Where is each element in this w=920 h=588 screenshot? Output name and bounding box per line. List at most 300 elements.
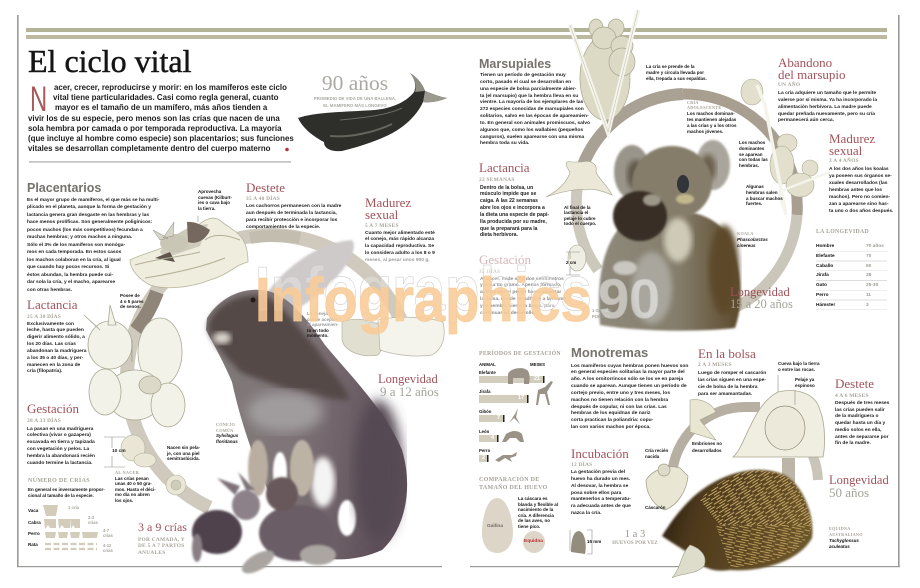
callout: cria recien nacida: Cría recién: [645, 448, 668, 453]
callout: cueva: [778, 361, 820, 372]
text: cortejo previo, entre uno y tres meses, los: [571, 391, 670, 396]
panel: madurez sexual conejo: lo considera adulto a los 8 o 9: [365, 251, 435, 256]
callout: pesa: [592, 308, 612, 318]
panel: abandono del marsupio: valerse por sí misma. Ya ha incorporado la: [778, 98, 877, 103]
text: año. A los ornitorrincos sólo se los ve en pareja: [571, 377, 683, 382]
panel: lactancia conejo: abandonan la madriguera: [27, 349, 87, 354]
text: corta practican la poliandria: copu-: [571, 418, 653, 423]
species label: koala: cinereus: [737, 243, 756, 248]
illustration: baby rabbits: [192, 472, 336, 578]
panel: placentarios: hace menos prolíficas. Son generalmente poligínicos:: [27, 220, 152, 225]
species label: conejo: Sylvilagus: [216, 433, 238, 438]
text: solitarios, salvo en las épocas de apareamien-: [480, 114, 589, 119]
stat: 1 a 3 huevos: [612, 529, 658, 546]
heading: periodos de gestacion: PERÍODOS DE GESTACIÓN: [479, 351, 561, 357]
panel: monotremas: Monotremas: [571, 345, 648, 360]
callout: senos: 4 o 5 pares: [120, 299, 144, 304]
panel: abandono del marsupio: Abandono: [778, 55, 832, 70]
panel: placentarios: pocos machos (los más competitivos) fecundan a: [27, 228, 143, 232]
illustration: newborn rabbit: [121, 435, 186, 495]
callout: hembras: hembras salen: [746, 190, 778, 195]
intro text: vitales se desarrollan completamente dentro del cuerpo materno: [28, 144, 270, 153]
panel: madurez sexual koala: sexual: [829, 142, 862, 158]
panel: madurez sexual conejo: [365, 195, 435, 263]
panel: placentarios: Es el mayor grupo de mamíferos, el que más se ha multi-: [27, 198, 159, 202]
callout: cria se prende: La cría se prende de la: [646, 64, 695, 69]
whale caption: PROMEDIO DE VIDA DE UNA BALLENA,: [314, 96, 396, 101]
callout: cria adolescente: tes mantienen alejadas: [687, 117, 736, 122]
icon: red end bullet: [285, 148, 289, 151]
panel: lactancia conejo: digerir alimento sólido, a: [27, 335, 85, 340]
callout: cueva: Cueva bajo la tierra: [778, 361, 820, 366]
callout: cria adolescente: a las crías y a los otros: [687, 123, 737, 128]
panel: abandono del marsupio: alimentación herbívora. La madre puede: [778, 105, 872, 110]
panel: destete conejo: 35 A 40 DÍAS: [246, 196, 280, 202]
panel: destete conejo: comportamientos de la especie.: [246, 225, 320, 230]
chart labels: gestacion: 2: [482, 455, 485, 461]
panel: en la bolsa: [698, 346, 766, 397]
callout: madrigueras: [198, 189, 232, 211]
callout: madrigueras: cuevas (Kilburt-: [198, 195, 232, 200]
callout: senos: Posee de: [120, 293, 140, 298]
litter labels: crías: [103, 548, 113, 553]
illustration: whale: [298, 73, 447, 151]
panel: madurez sexual conejo: Madurez: [365, 195, 411, 210]
panel: numero de crias: Rata: [28, 542, 38, 547]
egg labels: Gallina: [487, 524, 503, 529]
panel: numero de crias: Cabra: [28, 520, 41, 525]
callout: cria se prende: ella, trepada a sus espaldas.: [646, 76, 707, 81]
table: la longevidad: Caballo: [816, 264, 833, 268]
panel: incubacion: La gestación previa del: [571, 470, 625, 475]
panel: gestacion koala: Al nacer, mide sólo dos centímetros: [480, 276, 564, 282]
ring: koala life cycle: [576, 94, 797, 312]
icon: echidna egg silhouette: [571, 531, 586, 554]
panel: destete equidna: quedar hasta un día y: [835, 421, 885, 426]
panel: placentarios: plicado en el planeta, aunque la forma de gestación y: [27, 205, 151, 210]
whale caption: EL MAMÍFERO MÁS LONGEVO: [323, 103, 387, 108]
panel: madurez sexual conejo: sexual: [365, 206, 398, 222]
species label: equidna: aculeatus: [829, 544, 850, 549]
panel: destete equidna: 4 A 6 MESES: [835, 392, 869, 398]
text: después de copular, ni con las crías. Las: [571, 405, 667, 410]
callout: al nacer: unas 40 o 50 gra-: [115, 481, 152, 486]
panel: lactancia conejo: [27, 297, 87, 374]
callout: cria adolescente: [687, 100, 737, 134]
table: la longevidad: 50: [866, 264, 871, 268]
table: la longevidad: 28: [866, 273, 871, 278]
illustration: echidna burrow: [733, 391, 825, 488]
panel: madurez sexual koala: [829, 131, 894, 214]
panel: destete conejo: Destete: [246, 180, 285, 195]
callout: coneja: al apareamien-: [307, 322, 339, 327]
table: la longevidad: [816, 229, 887, 310]
callout: embriones: Embriones no: [692, 441, 722, 446]
callout: cria adolescente: ADOLESCENTE: [687, 105, 721, 110]
panel: destete equidna: [835, 378, 889, 448]
panel: lactancia koala: [479, 160, 549, 238]
panel: abandono del marsupio: quedar preñada nuevamente, pero su cría: [778, 112, 875, 117]
panel: numero de crias: [28, 476, 105, 547]
panel: placentarios: mos en cada temporada. En estos casos: [27, 250, 121, 255]
panel: madurez sexual conejo: Cuanto mejor alimentado esté: [365, 230, 435, 236]
litter labels: 4-12: [103, 543, 111, 548]
panel: lactancia conejo: 25 A 30 DÍAS: [27, 314, 61, 320]
whale caption: [314, 71, 396, 108]
panel: destete equidna: medio solos en ella,: [835, 428, 881, 433]
callout: machos dominantes: Los machos: [739, 140, 765, 145]
callout: al nacer: mos. Hasta el déci-: [115, 487, 156, 492]
text: Los mamíferos cuyas hembras ponen huevos son: [571, 364, 688, 368]
species label: conejo: COMÚN: [216, 428, 234, 433]
panel: en la bolsa: Luego de romper el cascarón: [698, 371, 766, 376]
panel: gestacion conejo: cuando termine la lactancia.: [27, 461, 93, 466]
panel: en la bolsa: para ser amamantadas.: [698, 392, 752, 397]
callout: cascara: blanda y flexible al: [518, 502, 558, 507]
callout: al nacer: Las crías pesan: [115, 476, 149, 480]
panel: destete conejo: Los cachorros permanecen con la madre: [246, 204, 341, 209]
panel: en la bolsa: 2 A 3 MESES: [698, 362, 732, 368]
panel: lactancia koala: músculo impide que se: [480, 191, 536, 197]
callout: pelaje cubre: Al final de la: [564, 205, 591, 210]
panel: destete equidna: Después de tres meses: [835, 401, 889, 406]
egg label: equidna: Equidna: [524, 539, 543, 544]
table: la longevidad: Jirafa: [816, 273, 829, 278]
panel: incubacion: [571, 446, 631, 516]
chart labels: gestacion: Gibón: [479, 409, 491, 414]
illustration: echidna: [662, 470, 812, 578]
panel: madurez sexual koala: zan a aparearse sino has-: [829, 202, 889, 206]
panel: destete equidna: de la madriguera o: [835, 414, 878, 419]
panel: placentarios: los machos colaboran en la cría, al igual: [27, 258, 121, 262]
stat: longevidad equidna: [829, 474, 889, 499]
header bars: [26, 28, 887, 39]
intro text: sola hembra por camada o por temporada reproductiva. La mayoría: [28, 124, 281, 133]
illustration: koala climbing with young: [570, 10, 638, 132]
panel: gestacion koala: avanza por el pelaje hasta alcanzar: [480, 290, 561, 295]
panel: placentarios: Placentarios: [27, 181, 101, 195]
species label: equidna: [829, 526, 863, 550]
panel: gestacion koala: continuar su desarrollo.: [480, 311, 536, 316]
panel: destete equidna: las crías pueden salir: [835, 408, 885, 413]
chart labels: gestacion: Jirafa: [479, 389, 490, 394]
panel: lactancia conejo: los 20 días. Las crías: [27, 342, 76, 347]
panel: lactancia conejo: manecen en la zona de: [27, 363, 80, 368]
text: Tienen un período de gestación muy: [480, 73, 566, 78]
panel: en la bolsa: En la bolsa: [698, 346, 756, 361]
panel: placentarios: lactancia genera gran desgaste en las hembras y las: [27, 212, 149, 218]
panel: abandono del marsupio: La cría adquiere un tamaño que le permite: [778, 91, 876, 96]
panel: abandono del marsupio: del marsupio: [778, 66, 846, 82]
stat: longevidad equidna: Longevidad: [829, 473, 889, 487]
table: la longevidad: 3: [866, 302, 869, 308]
stat: 3 a 9 crias: POR CAMADA, Y: [138, 536, 185, 542]
panel: incubacion: Al desovar, la hembra se: [571, 484, 628, 489]
callout: cria adolescente: CRÍA: [687, 100, 699, 105]
panel: numero de crias: NÚMERO DE CRÍAS: [28, 478, 90, 484]
panel: madurez sexual conejo: el conejo, más rápido alcanza: [365, 237, 434, 242]
panel: madurez sexual koala: ya poseen sus órganos se-: [829, 174, 892, 178]
table: la longevidad: 70: [866, 254, 871, 259]
stat: longevidad conejo: Longevidad: [378, 372, 438, 386]
litter labels: 4-7: [103, 528, 109, 533]
panel: madurez sexual koala: machos). Pero no comien-: [829, 194, 890, 200]
litter labels: [68, 505, 113, 553]
intro text: [28, 83, 294, 153]
illustration: rabbit in burrow nest: [130, 218, 248, 288]
panel: destete conejo: aun después de terminada la lactancia,: [246, 211, 337, 216]
panel: gestacion koala: [479, 252, 566, 316]
panel: numero de crias: Vaca: [28, 508, 38, 513]
callout: pelaje: espinoso: [795, 383, 815, 388]
callout: cascara: La cáscara es: [518, 496, 548, 501]
panel: gestacion conejo: La pasan en una madriguera: [27, 426, 93, 432]
panel: numero de crias: cional al tamaño de la especie.: [28, 493, 94, 498]
species label: conejo: floridanus: [216, 439, 238, 444]
panel: madurez sexual conejo: la capacidad reproductiva. Se: [365, 244, 434, 249]
drop cap: N: [30, 80, 47, 119]
callout: pesa: POR cría: [592, 314, 610, 318]
panel: incubacion: huevo ha durado un mes.: [571, 477, 630, 482]
heading: comparacion de huevo: TAMAÑO DEL HUEVO: [479, 485, 548, 491]
callout: cascara: tiene pico.: [518, 524, 540, 529]
panel: lactancia conejo: leche, hasta que pueden: [27, 328, 84, 333]
stat: longevidad conejo: 9 a 12 años: [380, 384, 439, 399]
callout: cascara: de las aves, no: [518, 518, 550, 523]
callout: hembras: a buscar machos: [746, 196, 783, 201]
intro text: vital tiene particularidades. Casi como regla general, cuanto: [53, 93, 278, 102]
species label: conejo: [216, 422, 238, 444]
callout: madrigueras: la tierra.: [198, 206, 216, 211]
callout: cascara: nacimiento de la: [518, 507, 553, 512]
callout: senos: [120, 293, 144, 309]
panel: lactancia conejo: a los 35 o 40 días, y per-: [27, 356, 83, 361]
panel: gestacion koala: la bolsa, donde se adhiere a la mama: [480, 297, 566, 302]
table: la longevidad: LA LONGEVIDAD: [816, 229, 869, 235]
title: El ciclo vital: [28, 43, 192, 79]
chart labels: gestacion: ANIMAL: [479, 362, 496, 367]
chart labels: gestacion: MESES: [530, 362, 545, 367]
illustration: egg nest: [646, 464, 688, 510]
icons: litter size animals: [43, 505, 98, 549]
callout: machos dominantes: con todas las: [739, 157, 768, 162]
measure: 10 cm: 10 cm: [112, 449, 126, 454]
illustration: pouch young echidna: [690, 400, 716, 440]
callout: al nacer: AL NACER: [115, 470, 139, 475]
panel: madurez sexual koala: 3 A 4 AÑOS: [829, 158, 859, 164]
litter labels: 1 cría: [68, 505, 79, 510]
panel: lactancia conejo: Exclusivamente con: [27, 322, 74, 326]
species label: equidna: Tachyglossus: [829, 538, 859, 543]
callout: madrigueras: ies o cava bajo: [198, 200, 230, 205]
callout: al nacer: los ojos.: [115, 498, 133, 503]
callout: al nacer: mo día no abren: [115, 492, 150, 497]
callout: hembras: [746, 184, 783, 206]
stat: 1 a 3 huevos: HUEVOS POR VEZ: [612, 541, 658, 546]
callout: cria recien nacida: [645, 448, 668, 459]
panel: lactancia koala: Dentro de la bolsa, un: [480, 184, 533, 190]
panel: destete equidna: fin de la madre.: [835, 441, 871, 446]
panel: gestacion koala: Gestación: [479, 252, 531, 267]
text: canguros), suelen aparearse con una misma: [480, 135, 584, 140]
panel: madurez sexual koala: xuales desarrollados (las: [829, 180, 887, 186]
panel: en la bolsa: las crías siguen en una espe-: [698, 378, 766, 383]
text: hembras de los equidnas de nariz: [571, 411, 650, 416]
panel: lactancia koala: que la preparará para la: [480, 226, 537, 232]
stat: 3 a 9 crias: DE 5 A 7 PARTOS: [138, 543, 184, 549]
stat: 3 a 9 crias: [138, 520, 187, 556]
callout: machos dominantes: [739, 140, 768, 168]
callout: cria se prende: madre y circula llevada por: [646, 70, 704, 75]
text: ta (el marsupio) que la hembra lleva en su: [480, 94, 578, 99]
chart labels: gestacion: Elefante: [479, 370, 496, 375]
panel: destete conejo: para recibir protección e incorporar los: [246, 218, 337, 223]
measure: 2 cm: 2 cm: [566, 260, 576, 265]
callout: pesa: 1 GRAMO: [592, 308, 612, 313]
table: la longevidad: 11: [866, 293, 871, 298]
callout: cascara: cría. A diferencia: [518, 513, 554, 518]
panel: monotremas: [571, 345, 688, 430]
chart: egg size comparison: [482, 498, 545, 553]
species label: equidna: EQUIDNA: [829, 526, 851, 531]
table: la longevidad: Hámster: [816, 302, 835, 308]
stat: 1 a 3 huevos: 1 a 3: [625, 529, 645, 540]
panel: lactancia koala: dieta herbívora.: [480, 232, 518, 238]
callout: coneja: La coneja: [307, 311, 328, 316]
panel: destete equidna: Destete: [835, 376, 874, 391]
panel: abandono del marsupio: UN AÑO: [778, 82, 800, 88]
callout: pelaje cubre: lactancia el: [564, 210, 588, 215]
panel: lactancia koala: abre los ojos e incorpora a: [480, 205, 545, 211]
panel: incubacion: posa sobre ellos para: [571, 491, 621, 496]
callout: embriones: [692, 441, 722, 454]
litter labels: crías: [103, 533, 113, 538]
callout: hembras: Algunas: [746, 184, 764, 189]
panel: lactancia koala: lla producida por su madre,: [480, 219, 547, 225]
watermark: orange text: Infographics: [255, 266, 592, 334]
text: vientre. La mayoría de los ejemplares de las: [480, 100, 583, 105]
ring: rabbit life cycle: [80, 188, 460, 568]
text: hembra toda su vida.: [480, 141, 529, 146]
chart labels: gestacion: 21: [534, 376, 540, 382]
intro text: mayor es el tamaño de un mamífero, más años tienden a: [55, 103, 267, 112]
panel: incubacion: nazca la cría.: [571, 511, 601, 516]
panel: gestacion koala: y la hembra cierra la bolsa, para: [480, 304, 554, 309]
chart: gestation bars: [479, 376, 544, 462]
panel: incubacion: Incubación: [571, 446, 629, 461]
panel: gestacion conejo: con vegetación y pelos. La: [27, 447, 89, 452]
panel: lactancia koala: la dieta una especie de papi-: [480, 212, 549, 218]
text: lan con varios machos por época.: [571, 425, 651, 430]
table: la longevidad: Perro: [816, 293, 829, 298]
panel: lactancia koala: 22 SEMANAS: [479, 176, 515, 182]
panel: placentarios: dar sola la cría, y el macho, aparearse: [27, 280, 115, 285]
panel: en la bolsa: cie de bolsa de la hembra: [698, 385, 758, 390]
panel: abandono del marsupio: [778, 55, 878, 123]
text: algunos que, como los wallabies (pequeños: [480, 128, 583, 133]
panel: destete conejo: [246, 180, 342, 230]
watermark: outline copy: Infographics: [255, 255, 592, 324]
callout: nacen sin pelaje: [166, 445, 200, 461]
panel: placentarios: éstos abundan, la hembra puede cui-: [27, 272, 113, 278]
divider under intro: [29, 160, 291, 163]
text: una especie de bolsa parcialmente abier-: [480, 87, 576, 92]
panel: lactancia koala: Lactancia: [479, 160, 530, 175]
callout: senos: de senos.: [120, 304, 141, 309]
icon: size measure lines: [104, 216, 795, 554]
panel: gestacion conejo: [27, 401, 95, 466]
panel: gestacion conejo: 28 A 33 DÍAS: [27, 418, 61, 424]
ring: echidna life cycle: [672, 407, 818, 480]
callout: nacen sin pelaje: Nacen sin pela-: [167, 445, 200, 450]
callout: cascaron: Cáscarón: [645, 505, 666, 510]
panel: incubacion: 12 DÍAS: [571, 462, 592, 468]
stat: 3 a 9 crias: ANUALES: [138, 550, 166, 556]
illustration: adolescent and mating koalas: [741, 79, 830, 215]
table: la longevidad: Elefante: [816, 254, 835, 259]
callout: coneja: puede aceptar: [307, 317, 338, 322]
callout: nacen sin pelaje: semitraslúcida.: [167, 456, 200, 461]
text: 272 especies conocidas de marsupiales son: [480, 107, 584, 112]
illustration: nursing young rabbit: [84, 305, 185, 427]
panel: gestacion conejo: excavada en tierra y tapizada: [27, 440, 95, 445]
stat: longevidad koala: [730, 285, 793, 311]
panel: placentarios: [27, 181, 160, 292]
callout: pelaje: [795, 377, 815, 389]
callout: embriones: desarrollados: [692, 448, 722, 452]
chart labels: gestacion: León: [479, 429, 489, 434]
chart labels: gestacion: Perro: [479, 448, 490, 453]
callout: machos dominantes: dominantes: [739, 146, 764, 151]
species label: koala: KOALA: [737, 231, 754, 236]
callout: coneja: to en todo: [307, 328, 329, 333]
species label: equidna: AUSTRALIANO: [829, 532, 863, 537]
text: cuando se aparean. Aunque tienen un período de: [571, 384, 687, 389]
text: machos no tienen relación con la hembra: [571, 398, 668, 403]
callout: coneja: [307, 311, 339, 338]
callout: coneja: momento.: [307, 333, 329, 338]
panel: gestacion conejo: hembra la abandonará recién: [27, 454, 95, 459]
intro text: acer, crecer, reproducirse y morir: en los mamíferos este ciclo: [54, 83, 287, 92]
text: to. En general son animales promiscuos, salvo: [480, 121, 590, 126]
litter labels: 2-3: [88, 515, 94, 520]
panel: numero de crias: En general es inversamente propor-: [28, 487, 105, 492]
panel: gestacion conejo: colectiva (vivar o gazapera): [27, 433, 91, 438]
panel: incubacion: ra adecuada antes de que: [571, 504, 631, 509]
stat: longevidad koala: 15 a 20 años: [730, 297, 793, 311]
heading: comparacion de huevo: [479, 476, 548, 491]
text: con otras hembras.: [27, 288, 72, 292]
panel: numero de crias: Perro: [28, 531, 40, 536]
callout: cascara: [518, 496, 558, 529]
text: en general especies solitarias la mayor parte del: [571, 370, 685, 375]
panel: gestacion koala: 35 DÍAS: [479, 268, 500, 274]
text: corto, pasado el cual se desarrollan en: [480, 80, 571, 85]
heading: comparacion de huevo: COMPARACIÓN DE: [479, 477, 540, 483]
illustration: mating rabbits: [342, 317, 444, 356]
chart labels: gestacion: 4: [491, 435, 494, 441]
icons: gestation animals: [495, 368, 553, 462]
callout: hembras: fuertes.: [746, 201, 762, 206]
panel: lactancia koala: caiga. A las 22 semanas: [480, 198, 538, 204]
measure: 15 mm: 15 mm: [587, 539, 601, 544]
callout: cria adolescente: Los machos dominan-: [687, 111, 735, 116]
callout: cria se prende: [646, 64, 707, 81]
whale caption: 90 años: [322, 71, 388, 95]
panel: lactancia conejo: cría (filopatría).: [27, 369, 62, 374]
panel: gestacion conejo: Gestación: [27, 401, 79, 416]
panel: madurez sexual koala: A los dos años los koalas: [829, 166, 889, 172]
